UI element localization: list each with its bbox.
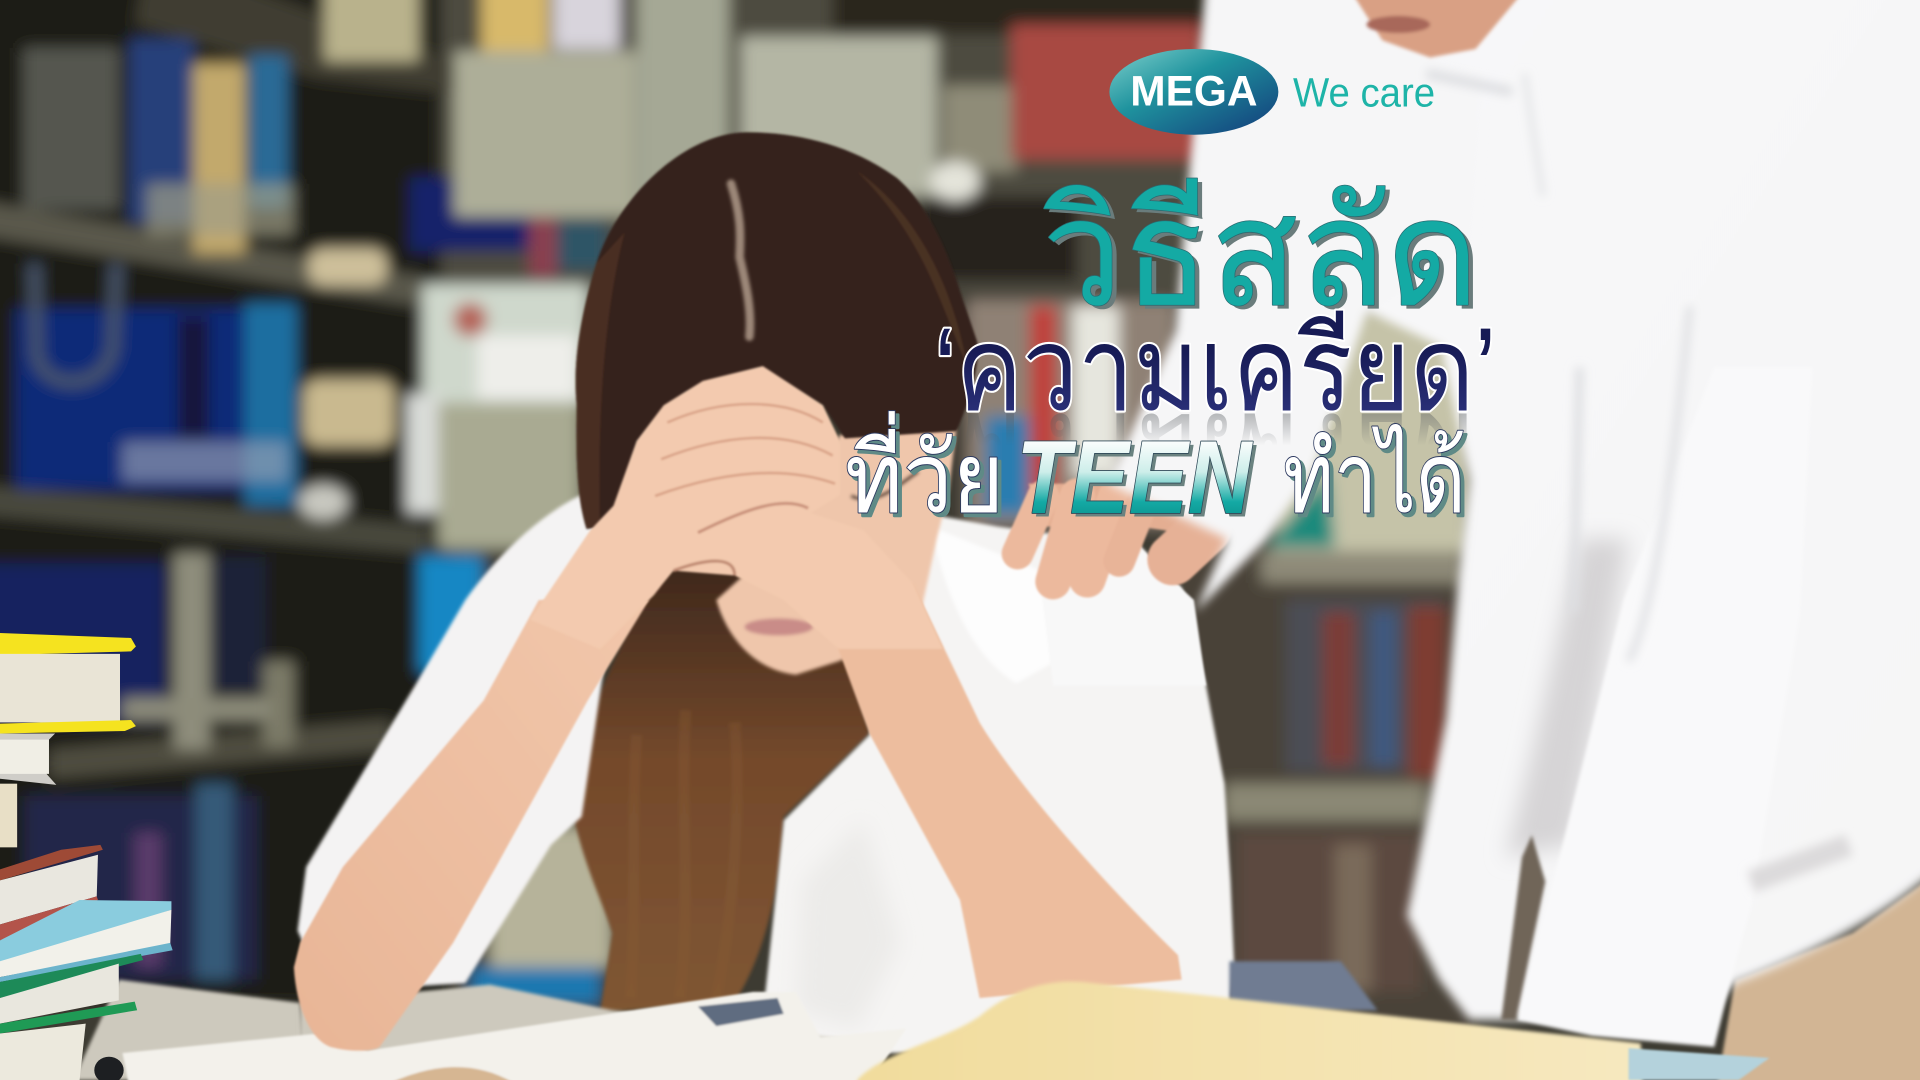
title <box>845 170 1496 540</box>
logo wordmark: MEGA <box>1130 67 1258 115</box>
yellow book <box>0 633 136 733</box>
man hem and torso <box>1298 0 1920 1020</box>
green book <box>0 954 143 1080</box>
desk middle <box>300 984 857 1080</box>
man trousers <box>1714 857 1920 1080</box>
chair back <box>1229 961 1378 1010</box>
girl left arm <box>294 600 649 1051</box>
white book <box>0 733 56 847</box>
title line 3: TEEN: TEEN <box>1020 424 1257 540</box>
blue notebook <box>1629 1048 1769 1080</box>
yellow folder <box>857 982 1643 1080</box>
hair parting <box>731 184 750 337</box>
man with white shirt <box>1108 0 1920 1080</box>
girl long hair <box>566 490 869 1013</box>
man hand on shoulder <box>1018 484 1224 582</box>
girl face <box>716 429 956 675</box>
open book <box>122 992 906 1080</box>
desk <box>73 980 306 1080</box>
logo tagline: We care <box>1293 70 1435 116</box>
shirt folds <box>1427 73 1849 882</box>
desk and chair and open book <box>73 961 1378 1080</box>
logo: MEGA We care <box>1109 49 1435 135</box>
title line 3: thai lead: ที่วัย <box>845 411 1004 533</box>
arm shadow <box>1506 539 1629 857</box>
girl right arm <box>820 576 1182 998</box>
man chin and neck <box>1341 0 1537 58</box>
man sleeve towards shoulder <box>1108 0 1482 612</box>
title line 3: TEEN: TEEN <box>1016 420 1253 536</box>
title line 3: thai end: ทำได้ <box>1287 427 1469 537</box>
stack of books <box>0 633 173 1080</box>
blue book <box>0 900 173 982</box>
man near sleeve and cuff <box>1517 367 1812 1047</box>
title line 2: ‘ความเครียด’ <box>934 304 1496 435</box>
title line 2 reflection: ‘ความเครียด’ <box>934 389 1496 520</box>
title line 1: วิธีสลัด <box>1047 174 1484 341</box>
girl hair top <box>576 132 978 529</box>
title line 3: thai end: ทำได้ <box>1283 423 1466 533</box>
title line 1: วิธีสลัด <box>1042 170 1479 337</box>
girl shirt <box>298 492 1234 1053</box>
girl shoulder fabric <box>1041 539 1206 686</box>
title line 3: thai lead: ที่วัย <box>849 415 1008 537</box>
foreground folder and books <box>857 982 1769 1080</box>
photo: student <box>73 132 1378 1080</box>
gap between arm and torso <box>1501 835 1545 1020</box>
brown book <box>0 845 103 940</box>
logo oval <box>1109 49 1278 135</box>
girl clasped hands <box>530 366 943 649</box>
pen <box>94 1057 124 1080</box>
